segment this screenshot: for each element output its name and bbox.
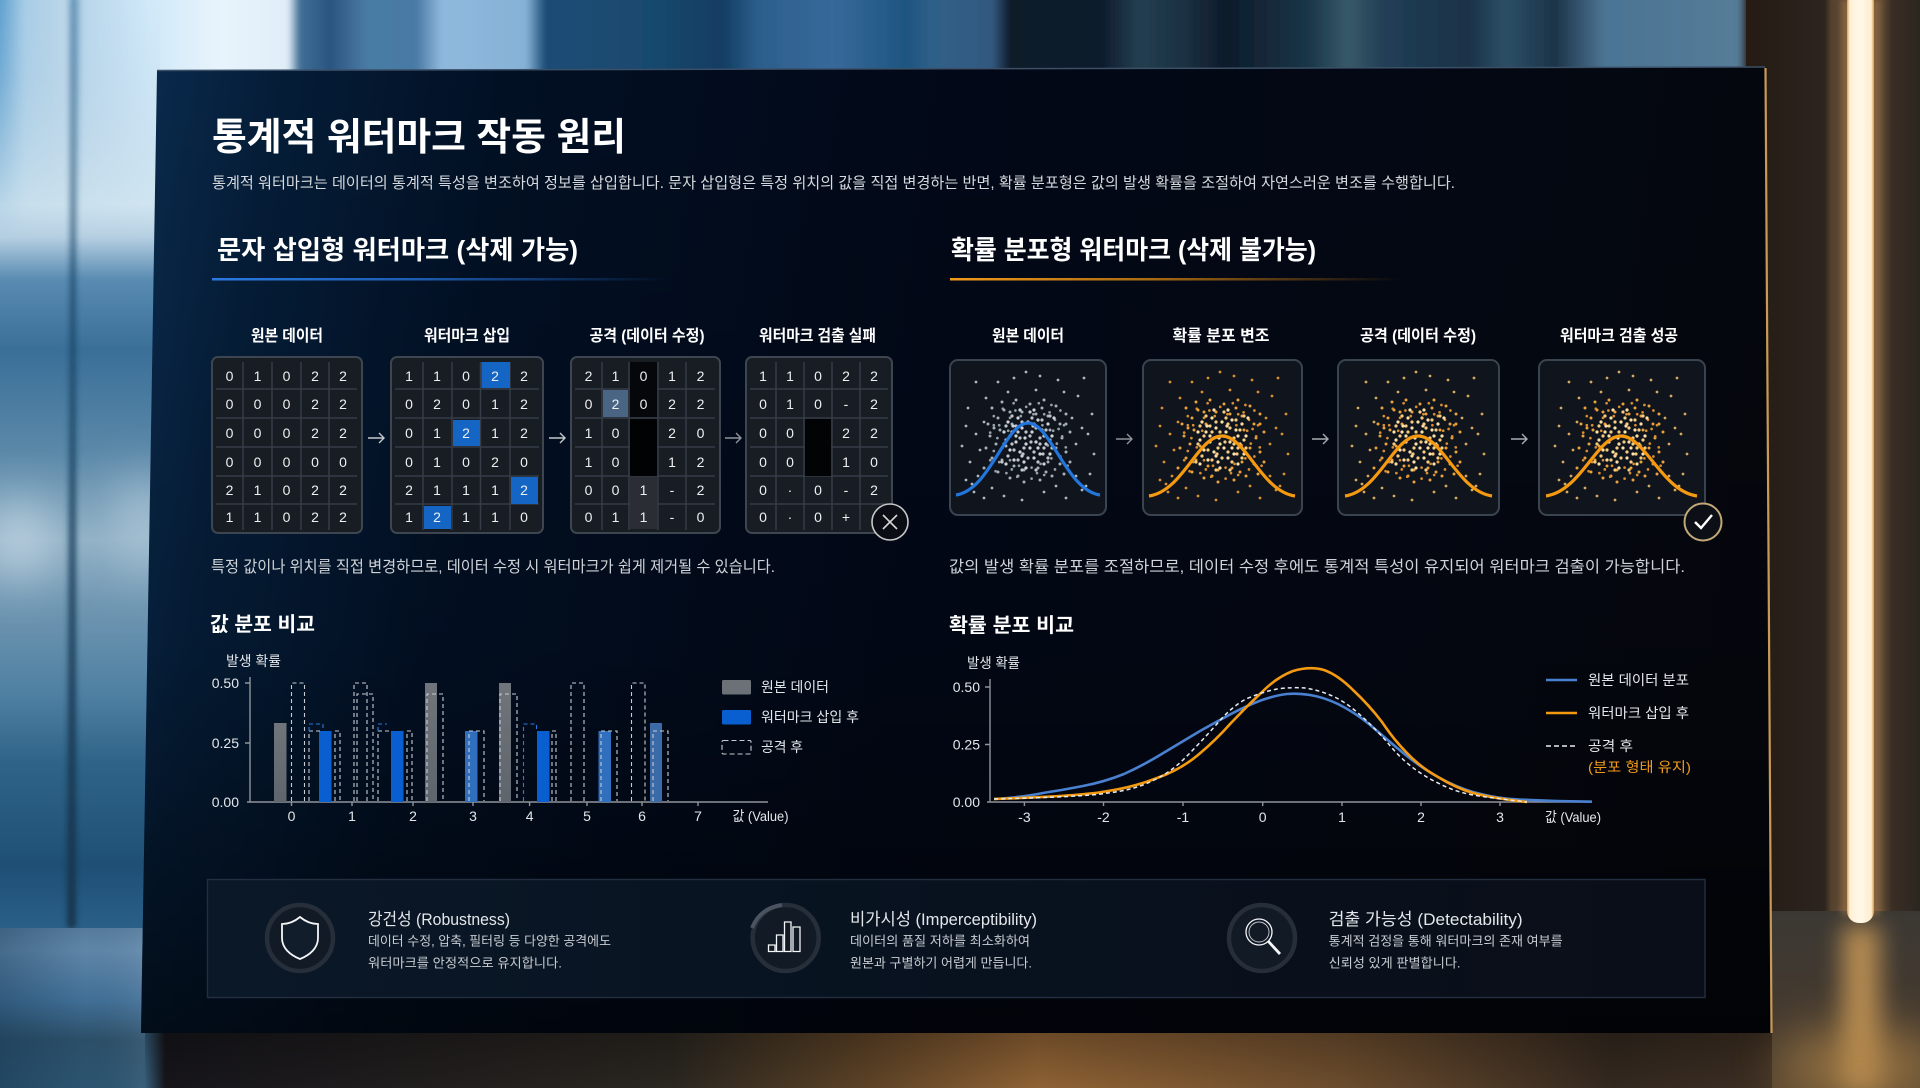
legend: bars: 워터마크 삽입 후 <box>761 709 859 725</box>
heading: probability distribution: 확률 분포형 워터마크 (삭제 불가능) <box>951 235 1316 265</box>
blue bars: after insertion <box>319 723 662 802</box>
arrow <box>368 433 384 443</box>
x axis labels: 4 <box>526 808 534 824</box>
underline: blue <box>212 278 670 280</box>
robustness text: 강건성 (Robustness) <box>368 910 510 929</box>
step label: distribution modulation: 확률 분포 변조 <box>1172 327 1270 345</box>
dashed outlines: blue attack tops <box>309 724 536 801</box>
grid: watermark inserted: 01212 <box>405 425 528 441</box>
x axis labels: 2 <box>1417 809 1425 825</box>
grid: watermark inserted: 12110 <box>405 509 528 525</box>
y axis labels: 0.00 <box>953 794 980 810</box>
caption: character insertion: 특정 값이나 위치를 직접 변경하므로, 데이터 수정 시 워터마크가 쉽게 제거될 수 있습니다. <box>211 558 775 576</box>
grid: detection failed: 010-2 <box>759 396 878 412</box>
legend: bars <box>722 679 859 755</box>
arrow <box>1511 434 1527 444</box>
grid: original data: 00022 <box>226 425 347 441</box>
icon: failure X badge <box>872 504 908 540</box>
grid: attacked data: 001-2 <box>585 482 705 498</box>
legend: curves: (분포 형태 유지) <box>1588 759 1691 775</box>
y axis labels: 0.00 <box>212 794 239 810</box>
grid: original data <box>212 357 362 533</box>
x axis labels: 2 <box>409 808 417 824</box>
imperceptibility text <box>850 910 1037 970</box>
y axis title: 발생 확률 <box>226 653 281 669</box>
detectability text: 통계적 검정을 통해 워터마크의 존재 여부를 <box>1329 934 1563 948</box>
underline: orange <box>950 278 1400 280</box>
x axis labels: 1 <box>1338 809 1346 825</box>
arrow <box>1116 434 1132 444</box>
legend: curves <box>1546 672 1691 775</box>
icon: success check badge <box>1684 504 1722 540</box>
property: detectability <box>1229 905 1563 971</box>
x axis labels: 값 (Value) <box>1545 809 1601 825</box>
grid: watermark inserted: 21112 <box>405 482 528 498</box>
x axis labels: -3 <box>1018 809 1031 825</box>
icon: magnifier <box>1229 905 1295 971</box>
arrow <box>1312 434 1328 444</box>
y axis labels <box>953 679 980 810</box>
icon: bar chart <box>752 905 819 971</box>
detectability text: 신뢰성 있게 판별합니다. <box>1329 956 1461 970</box>
grid: original data: 00000 <box>226 454 347 470</box>
legend: curves: 워터마크 삽입 후 <box>1588 705 1689 721</box>
x axis labels: 1 <box>348 808 356 824</box>
axes <box>245 677 768 806</box>
grid: watermark inserted: 01020 <box>405 454 528 470</box>
grid: original data: 11022 <box>226 509 347 525</box>
panel: display board <box>141 67 1772 1033</box>
x axis labels: 값 (Value) <box>732 808 788 824</box>
grid: attacked data: 21012 <box>585 368 705 384</box>
chart: value distribution bars <box>210 613 859 824</box>
step label: detection failed: 워터마크 검출 실패 <box>759 327 876 345</box>
x axis labels: 0 <box>1259 809 1267 825</box>
grid: attacked data: 1020 <box>585 425 705 441</box>
detectability text <box>1329 910 1563 970</box>
robustness text: 데이터 수정, 압축, 필터링 등 다양한 공격에도 <box>368 934 611 948</box>
x axis labels: 7 <box>694 808 702 824</box>
x axis labels <box>1018 809 1601 825</box>
imperceptibility text: 비가시성 (Imperceptibility) <box>850 910 1037 929</box>
step label: detection succeeded: 워터마크 검출 성공 <box>1560 327 1678 345</box>
y axis labels: 0.50 <box>953 679 980 695</box>
step label: original data: 원본 데이터 <box>992 327 1064 345</box>
grid: detection failed: 11022 <box>759 368 878 384</box>
light strip <box>1780 0 1920 1088</box>
scatter panel: modulated <box>1143 360 1302 515</box>
imperceptibility text: 원본과 구별하기 어렵게 만듭니다. <box>850 956 1032 970</box>
grid: attacked data: 1012 <box>585 454 705 470</box>
curve: original distribution <box>994 694 1592 802</box>
chart heading: 값 분포 비교 <box>210 613 315 636</box>
intro text: 통계적 워터마크는 데이터의 통계적 특성을 변조하여 정보를 삽입합니다. 문자 삽입형은 특정 위치의 값을 직접 변경하는 반면, 확률 분포형은 값의 발생 확률을 조절하여 자연스러운 변조를 수행합니다. <box>212 174 1455 192</box>
grid: detection failed: 0010 <box>759 454 878 470</box>
scatter panel: attacked <box>1338 360 1499 515</box>
arrow <box>725 433 741 443</box>
legend: bars: 공격 후 <box>761 739 803 755</box>
panel: character insertion watermark <box>211 235 908 576</box>
heading: character insertion: 문자 삽입형 워터마크 (삭제 가능) <box>217 235 578 265</box>
imperceptibility text: 데이터의 품질 저하를 최소화하여 <box>850 934 1030 948</box>
panel: probability distribution watermark <box>949 235 1722 576</box>
grid: attacked data: 011-0 <box>585 509 705 525</box>
grid: detection failed <box>746 357 892 533</box>
robustness text: 워터마크를 안정적으로 유지합니다. <box>368 956 562 970</box>
x axis labels: 5 <box>583 808 591 824</box>
x axis labels: 0 <box>288 808 296 824</box>
grid: original data: 21022 <box>226 482 347 498</box>
legend: curves: 원본 데이터 분포 <box>1588 672 1689 688</box>
y axis labels: 0.25 <box>212 735 239 751</box>
property: robustness <box>267 905 611 971</box>
y axis labels: 0.25 <box>953 736 980 752</box>
grid: watermark inserted <box>391 357 543 533</box>
step label: attack: 공격 (데이터 수정) <box>1360 327 1476 345</box>
legend: curves: 공격 후 <box>1588 738 1633 754</box>
step label: attack: 공격 (데이터 수정) <box>590 327 704 345</box>
curve: after attack <box>994 688 1527 802</box>
robustness text <box>368 910 611 970</box>
grid: original data: 00022 <box>226 396 347 412</box>
step label: watermark insertion: 워터마크 삽입 <box>424 327 510 345</box>
arrow <box>549 433 565 443</box>
title: 통계적 워터마크 작동 원리 <box>212 117 626 159</box>
curve: after insertion <box>994 668 1527 802</box>
x axis labels: 3 <box>469 808 477 824</box>
grid: attacked data <box>571 357 720 533</box>
x axis labels: -2 <box>1097 809 1110 825</box>
y axis title: 발생 확률 <box>967 655 1020 671</box>
detectability text: 검출 가능성 (Detectability) <box>1329 910 1523 929</box>
y axis labels: 0.50 <box>212 675 239 691</box>
icon: shield <box>267 905 333 971</box>
x axis labels: 3 <box>1496 809 1504 825</box>
chart heading: 확률 분포 비교 <box>949 614 1074 637</box>
scatter panel: original <box>950 360 1106 515</box>
legend: bars: 원본 데이터 <box>761 679 829 695</box>
step label: original data: 원본 데이터 <box>251 327 323 345</box>
x axis labels: 6 <box>638 808 646 824</box>
grey bars: original data <box>274 683 511 802</box>
grid: original data: 01022 <box>226 368 347 384</box>
x axis labels: -1 <box>1177 809 1189 825</box>
panel: key properties <box>208 880 1705 998</box>
x axis labels <box>288 808 788 824</box>
grid: detection failed: 0·0+ <box>759 509 850 525</box>
property: imperceptibility <box>752 905 1037 971</box>
dashed outlines: after attack <box>292 683 668 801</box>
caption: probability distribution: 값의 발생 확률 분포를 조절하므로, 데이터 수정 후에도 통계적 특성이 유지되어 워터마크 검출이 가능합니다. <box>949 558 1685 576</box>
scatter panel: detection succeeded <box>1539 360 1705 515</box>
chart: probability distribution curves <box>949 614 1691 825</box>
y axis labels <box>212 675 239 810</box>
grid: detection failed: 0022 <box>759 425 878 441</box>
grid: watermark inserted: 11022 <box>405 368 528 384</box>
grid: attacked data: 02022 <box>585 396 705 412</box>
axes <box>985 679 1592 806</box>
grid: watermark inserted: 02012 <box>405 396 528 412</box>
grid: detection failed: 0·0-2 <box>759 482 878 498</box>
